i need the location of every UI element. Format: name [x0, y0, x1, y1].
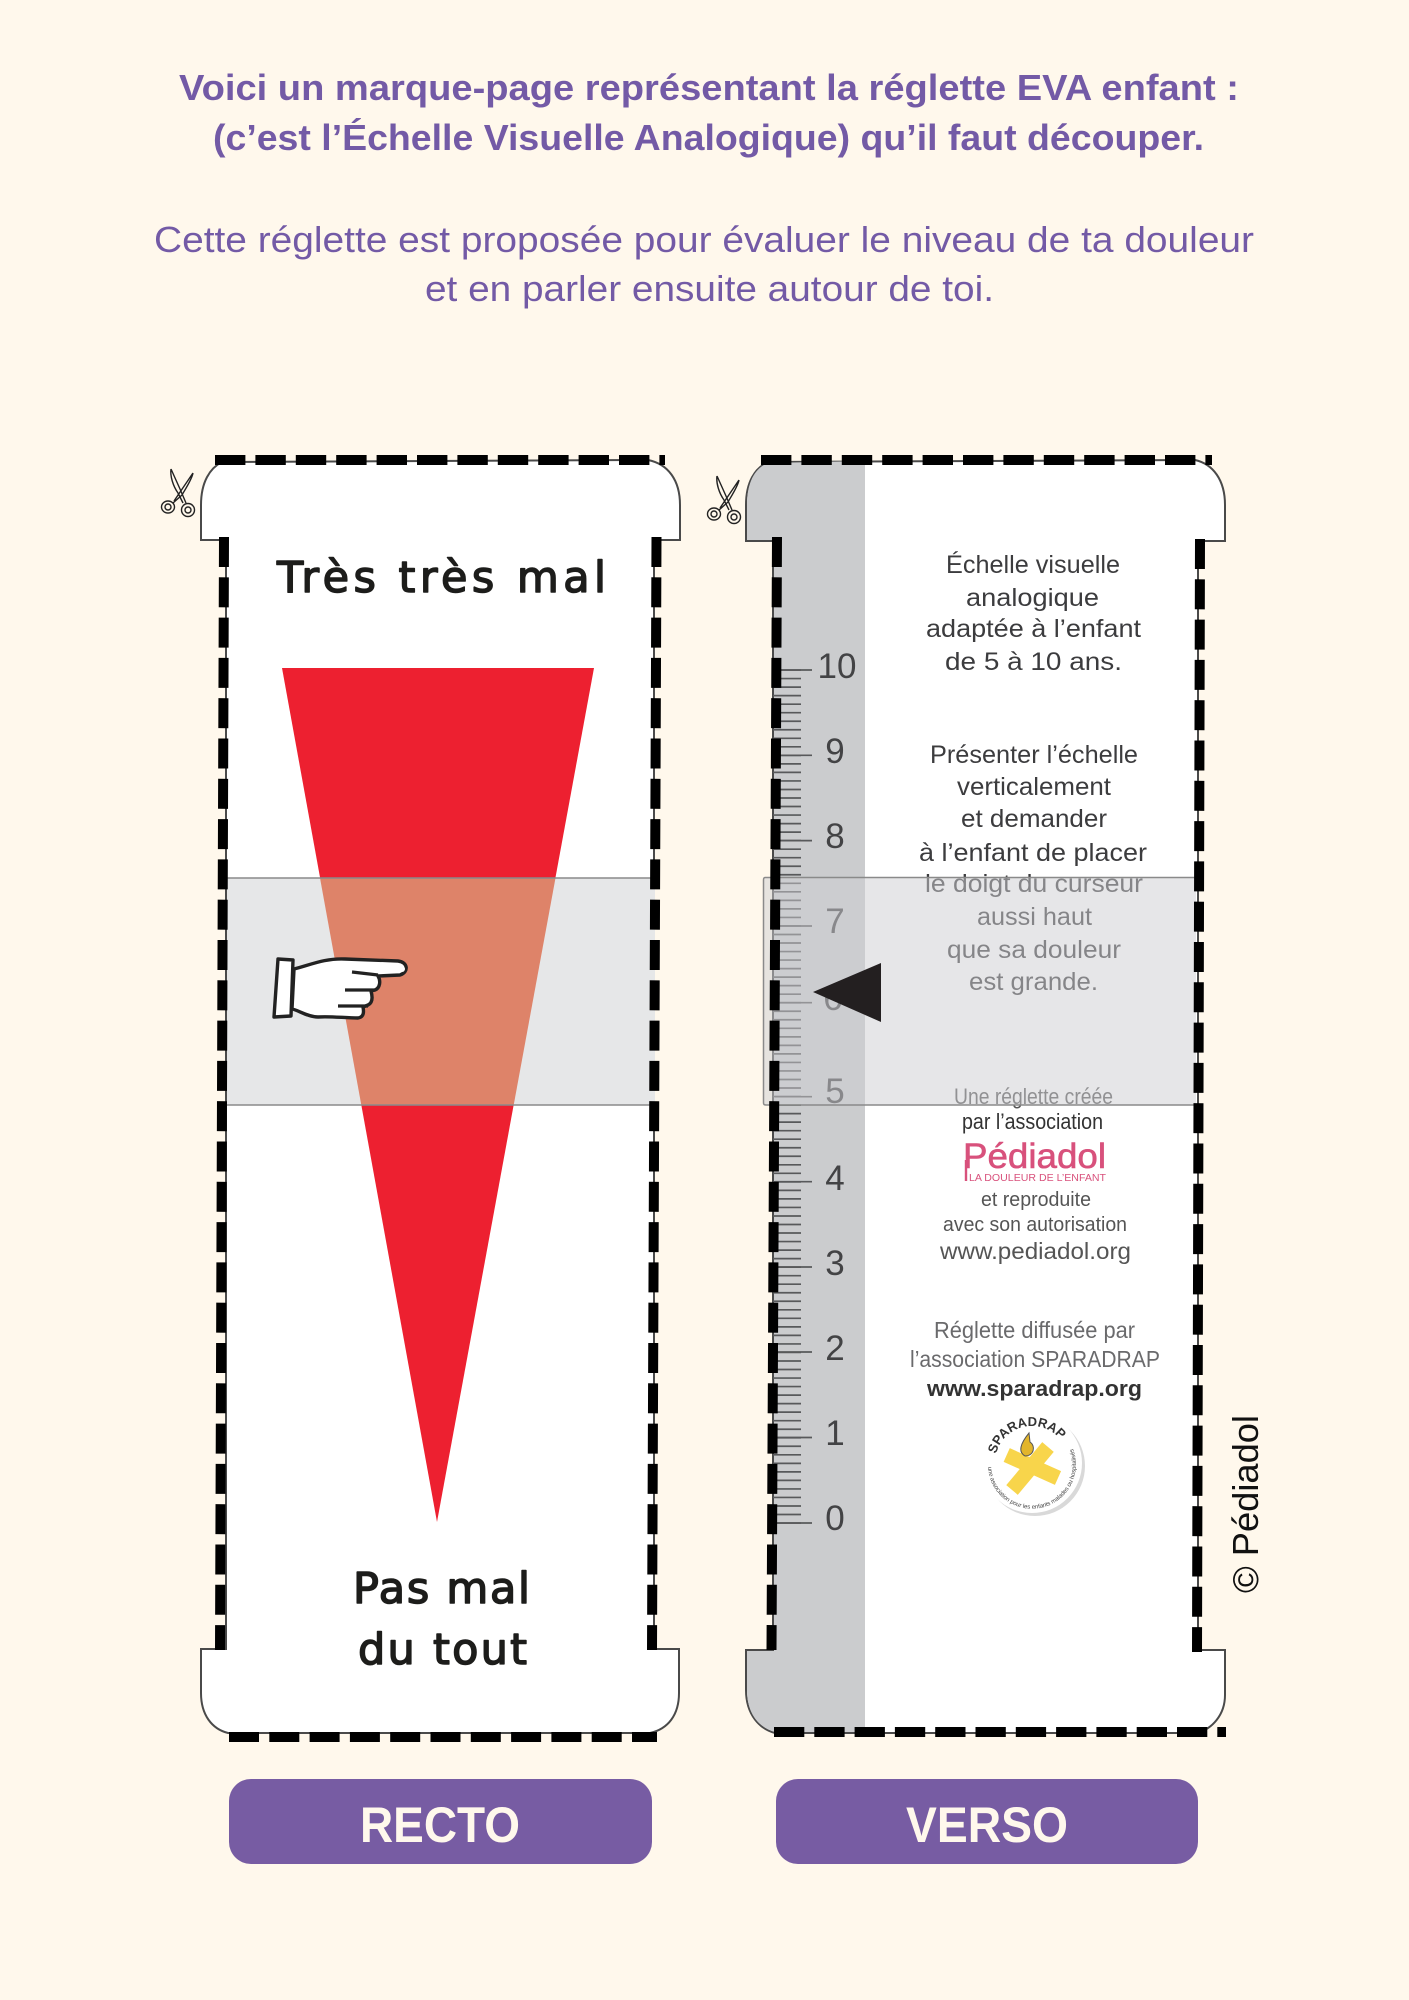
- label: pas mal du tout: Pas mal: [353, 1564, 530, 1614]
- title: heading and introduction: [154, 67, 1254, 309]
- ruler numbers: 1: [825, 1414, 845, 1453]
- panel: verso bookmark: [745, 455, 1226, 1737]
- label: pas mal du tout: [353, 1564, 530, 1675]
- text: description: Échelle visuelle: [946, 550, 1120, 579]
- text: sparadrap credit: l’association SPARADRAP: [910, 1346, 1160, 1372]
- text: instructions: à l’enfant de placer: [919, 839, 1147, 867]
- button: verso: [776, 1779, 1198, 1864]
- cut line: [761, 460, 1226, 1732]
- ruler numbers: 4: [825, 1159, 845, 1198]
- text: pediadol credit: [939, 1084, 1131, 1264]
- slider band: [763, 877, 1196, 1105]
- text: pediadol credit: Une réglette créée: [954, 1084, 1113, 1109]
- ruler numbers: 10: [818, 647, 856, 686]
- button: recto: RECTO: [360, 1797, 520, 1853]
- ruler numbers: 6: [823, 979, 843, 1018]
- intro line 2: et en parler ensuite autour de toi.: [425, 268, 994, 309]
- text: instructions: Présenter l’échelle: [930, 741, 1138, 769]
- text: pediadol credit: avec son autorisation: [943, 1214, 1127, 1236]
- button: verso: VERSO: [906, 1797, 1068, 1853]
- button: recto: [229, 1779, 652, 1864]
- grey scale strip: [747, 461, 865, 1732]
- ruler numbers: 0: [825, 1499, 845, 1538]
- ruler numbers: [818, 647, 856, 1538]
- icon: scissors verso: [708, 476, 740, 524]
- text: pediadol credit: Pédiadol: [963, 1137, 1106, 1176]
- bookmark outline: [746, 460, 1225, 1733]
- text: instructions: aussi haut: [977, 903, 1092, 931]
- bookmark outline: [201, 460, 680, 1733]
- cut line: [215, 460, 665, 1737]
- text: sparadrap credit: www.sparadrap.org: [926, 1376, 1142, 1401]
- icon: sparadrap logo: une association pour les enfants malades ou hospitalisés: [988, 1449, 1077, 1509]
- icon: pointing hand: [274, 959, 406, 1018]
- slider band: [227, 878, 655, 1105]
- text: sparadrap credit: Réglette diffusée par: [934, 1317, 1135, 1343]
- heading line 1: Voici un marque-page représentant la réglette EVA enfant :: [179, 67, 1239, 108]
- icon: cursor arrow: [813, 963, 881, 1022]
- heading line 2: (c’est l’Échelle Visuelle Analogique) qu’il faut découper.: [213, 117, 1204, 158]
- copyright note: © Pédiadol: [1225, 1415, 1266, 1593]
- text: description: adaptée à l’enfant: [926, 615, 1141, 643]
- ruler numbers: 8: [825, 817, 845, 856]
- text: instructions: et demander: [961, 805, 1107, 833]
- label: pas mal du tout: du tout: [358, 1625, 527, 1675]
- text: instructions: verticalement: [957, 773, 1111, 801]
- ruler numbers: 7: [825, 902, 845, 941]
- panel: recto bookmark: [201, 460, 680, 1737]
- text: description: [926, 550, 1141, 676]
- ruler numbers: 2: [825, 1329, 845, 1368]
- text: pediadol credit: LA DOULEUR DE L’ENFANT: [969, 1172, 1107, 1184]
- text: instructions: le doigt du curseur: [925, 870, 1143, 898]
- ruler ticks: [775, 669, 812, 1524]
- intro line 1: Cette réglette est proposée pour évaluer le niveau de ta douleur: [154, 219, 1254, 260]
- icon: scissors recto: [162, 469, 194, 516]
- text: pediadol credit: et reproduite: [981, 1189, 1091, 1211]
- text: description: analogique: [966, 584, 1099, 612]
- red pain triangle: [282, 668, 594, 1522]
- text: instructions: que sa douleur: [947, 936, 1121, 964]
- ruler numbers: 9: [825, 732, 845, 771]
- text: description: de 5 à 10 ans.: [945, 648, 1122, 676]
- text: instructions: [919, 741, 1147, 996]
- ruler numbers: 5: [825, 1072, 845, 1111]
- label: très très mal: Très très mal: [276, 553, 606, 603]
- icon: sparadrap logo: [988, 1417, 1085, 1516]
- ruler numbers: 3: [825, 1244, 845, 1283]
- text: sparadrap credit: [910, 1317, 1160, 1401]
- icon: sparadrap logo: SPARADRAP: [988, 1417, 1066, 1453]
- text: instructions: est grande.: [969, 968, 1098, 996]
- text: pediadol credit: www.pediadol.org: [939, 1238, 1131, 1264]
- text: pediadol credit: par l’association: [962, 1109, 1103, 1134]
